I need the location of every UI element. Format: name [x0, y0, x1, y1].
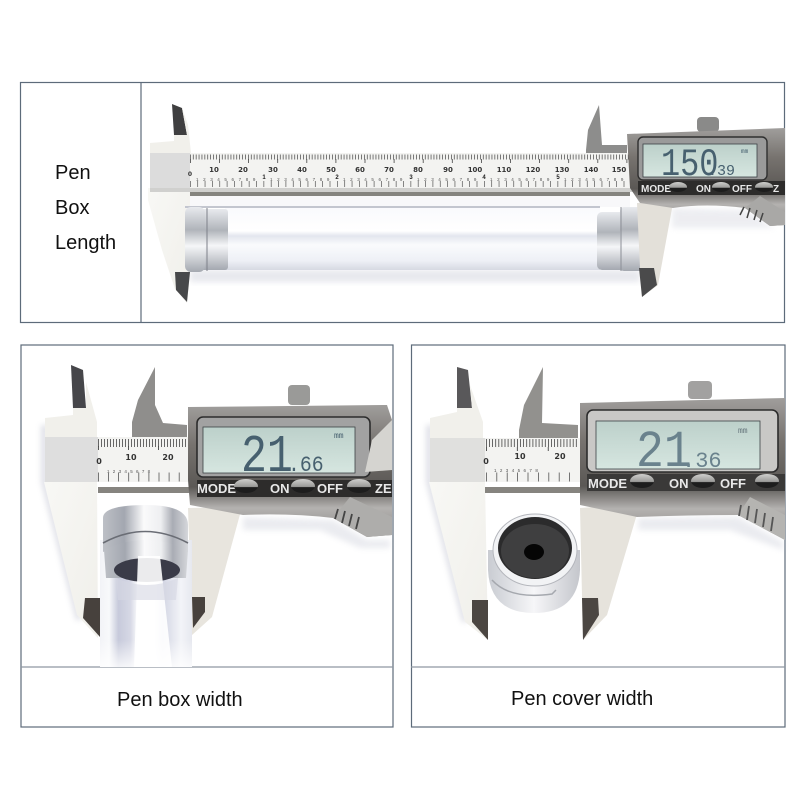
caliper photo: pen cover width: OFF: [720, 476, 746, 491]
caliper photo: length measurement: 150: [612, 166, 626, 174]
caliper photo: length measurement: 110: [497, 166, 511, 174]
caliper photo: pen box width: 10: [125, 453, 137, 462]
caliper photo: pen box width: ZE: [375, 481, 392, 496]
heading: pen box length: [55, 162, 116, 254]
caliper photo: length measurement: 1: [262, 175, 266, 181]
caliper photo: pen box width: OFF: [317, 481, 343, 496]
label: pen box width: Pen box width: [117, 689, 243, 711]
caliper photo: pen box width: MODE: [197, 481, 236, 496]
caliper photo: length measurement: 30: [268, 166, 278, 174]
pen cover cap: [488, 514, 580, 613]
caliper photo: pen cover width: .36: [682, 449, 722, 474]
caliper photo: length measurement: 140: [584, 166, 598, 174]
caliper photo: pen box width: ON: [270, 481, 290, 496]
panel: pen box length: [20, 82, 785, 323]
caliper photo: pen box width: 21: [241, 427, 293, 487]
panel: pen box width: [21, 345, 393, 727]
caliper photo: length measurement: 5: [556, 175, 560, 181]
caliper photo: pen box width: [41, 365, 392, 667]
caliper photo: length measurement: 130: [555, 166, 569, 174]
caliper photo: length measurement: 123456789: [270, 177, 334, 182]
caliper photo: length measurement: 0: [188, 171, 192, 178]
caliper photo: length measurement: 50: [326, 166, 336, 174]
caliper photo: length measurement: 60: [355, 166, 365, 174]
caliper photo: length measurement: ON: [696, 184, 711, 195]
caliper photo: pen cover width: 21: [636, 423, 692, 482]
caliper photo: pen box width: 20: [162, 453, 174, 462]
caliper photo: pen box width: 0: [96, 457, 102, 466]
caliper photo: length measurement: mm: [741, 148, 749, 155]
caliper photo: length measurement: [148, 104, 785, 303]
caliper photo: length measurement: 123456789: [196, 177, 260, 182]
label: pen cover width: Pen cover width: [511, 688, 653, 710]
caliper photo: length measurement: 40: [297, 166, 307, 174]
caliper photo: length measurement: .39: [708, 163, 735, 180]
caliper photo: length measurement: 123456789: [343, 177, 407, 182]
caliper photo: pen box width: mm: [334, 432, 344, 441]
caliper photo: length measurement: 70: [384, 166, 394, 174]
caliper photo: length measurement: 150: [661, 143, 718, 187]
panel: pen cover width: [411, 345, 785, 727]
heading: pen box length: Box: [55, 197, 89, 219]
caliper photo: length measurement: OFF: [732, 184, 752, 195]
caliper photo: length measurement: 2: [335, 175, 339, 181]
caliper photo: length measurement: 123456789: [490, 177, 554, 182]
pen box cylinder: [100, 505, 192, 667]
caliper photo: pen cover width: 10: [514, 452, 526, 461]
caliper photo: pen cover width: mm: [738, 427, 748, 436]
caliper photo: pen cover width: 12345678: [494, 468, 541, 473]
caliper photo: length measurement: MODE: [641, 184, 671, 195]
caliper photo: length measurement: 123456789: [564, 177, 628, 182]
caliper photo: length measurement: 80: [413, 166, 423, 174]
caliper photo: length measurement: 20: [238, 166, 248, 174]
caliper photo: length measurement: 123456789: [417, 177, 481, 182]
caliper photo: pen cover width: ON: [669, 476, 688, 491]
caliper photo: length measurement: 90: [443, 166, 453, 174]
caliper photo: pen cover width: 20: [554, 452, 566, 461]
heading: pen box length: Pen: [55, 162, 91, 184]
caliper photo: pen cover width: [426, 367, 785, 640]
caliper photo: length measurement: 4: [482, 175, 486, 181]
caliper photo: length measurement: 10: [209, 166, 219, 174]
caliper photo: length measurement: 100: [468, 166, 482, 174]
caliper photo: length measurement: Z: [773, 184, 779, 195]
caliper photo: pen box width: .66: [288, 454, 324, 478]
caliper photo: pen cover width: MODE: [588, 476, 627, 491]
caliper photo: pen cover width: 0: [483, 457, 489, 466]
heading: pen box length: Length: [55, 232, 116, 254]
glass tube: [185, 206, 645, 272]
caliper photo: length measurement: 120: [526, 166, 540, 174]
caliper photo: pen box width: 12345678: [107, 469, 153, 474]
caliper photo: length measurement: 3: [409, 175, 413, 181]
